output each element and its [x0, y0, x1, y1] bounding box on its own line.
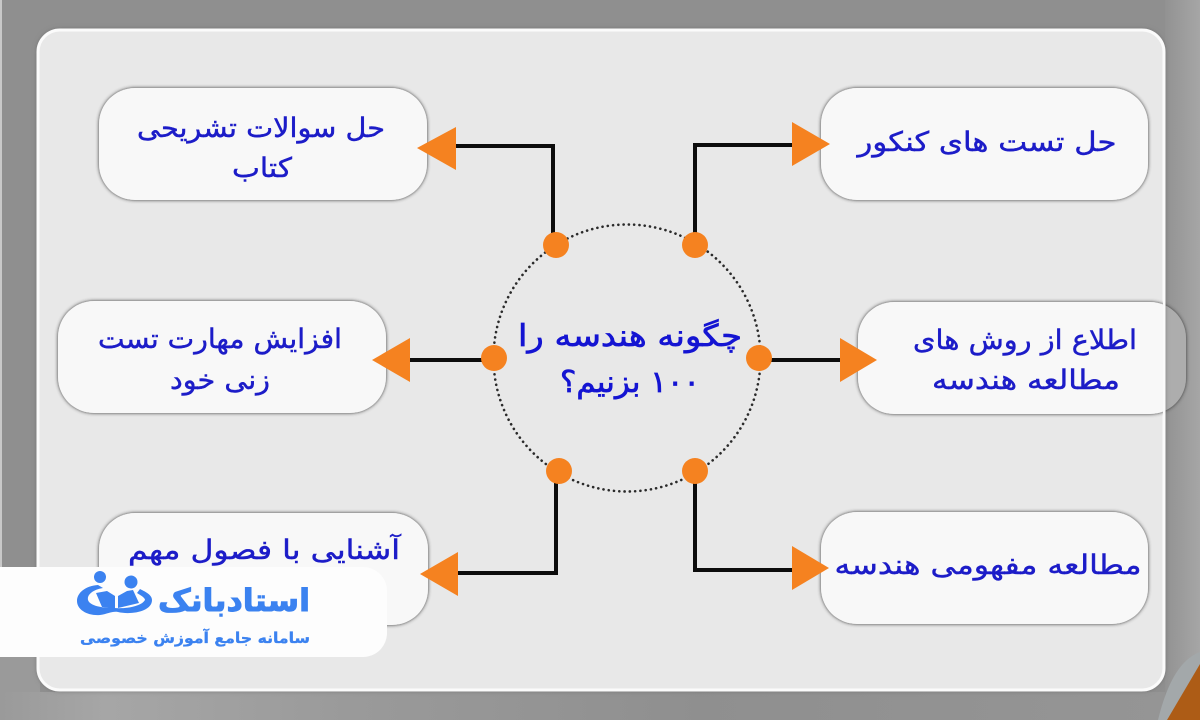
heading: center question: ۱۰۰ بزنیم؟: [560, 365, 700, 400]
card: middle left: زنی خود: [170, 365, 270, 396]
heading: center question: [518, 319, 742, 400]
node: middle left: [481, 345, 507, 371]
logo tagline: سامانه جامع آموزش خصوصی: [80, 629, 310, 647]
card: middle right: [858, 302, 1186, 414]
connector: middle left: [405, 358, 494, 362]
card: middle left: [58, 301, 386, 413]
card: bottom left: [99, 513, 428, 625]
connector: bottom right: [695, 471, 798, 570]
card: top right: حل تست های کنکور: [855, 127, 1116, 158]
connector: bottom left: [452, 471, 556, 573]
connector: top left: [450, 146, 553, 245]
node: top left: [543, 232, 569, 258]
card: middle right: اطلاع از روش های: [913, 325, 1137, 356]
arrow: top right: [792, 122, 830, 166]
card: middle left: افزایش مهارت تست: [98, 324, 342, 355]
card: bottom right: مطالعه مفهومی هندسه: [834, 550, 1142, 581]
node: bottom right: [682, 458, 708, 484]
box overflow: right side of middle-right box outside the panel: [1130, 302, 1186, 414]
card: top left: حل سوالات تشریحی: [137, 113, 385, 144]
connector: middle right: [759, 358, 845, 362]
arrow: middle right: [840, 338, 877, 382]
card: bottom left: آشنایی با فصول مهم: [128, 534, 402, 566]
logo wordmark: استادبانک: [158, 583, 310, 619]
logo panel: [0, 567, 387, 657]
arrow: top left: [417, 127, 456, 170]
card: top left: کتاب: [232, 153, 292, 184]
card: top left: [99, 88, 427, 200]
card: middle right: مطالعه هندسه: [932, 365, 1120, 396]
connector: top right: [695, 145, 798, 245]
circle: dotted ring: [494, 224, 760, 492]
heading: center question: چگونه هندسه را: [518, 319, 742, 354]
card: top right: [821, 88, 1148, 200]
arrow: bottom right: [792, 546, 829, 590]
arrow: middle left: [372, 338, 410, 382]
node: top right: [682, 232, 708, 258]
node: bottom left: [546, 458, 572, 484]
card: bottom right: [821, 512, 1148, 624]
node: middle right: [746, 345, 772, 371]
icon: logo people with book: [77, 571, 152, 615]
corner accent: orange: [1158, 652, 1200, 720]
arrow: bottom left: [420, 552, 458, 596]
